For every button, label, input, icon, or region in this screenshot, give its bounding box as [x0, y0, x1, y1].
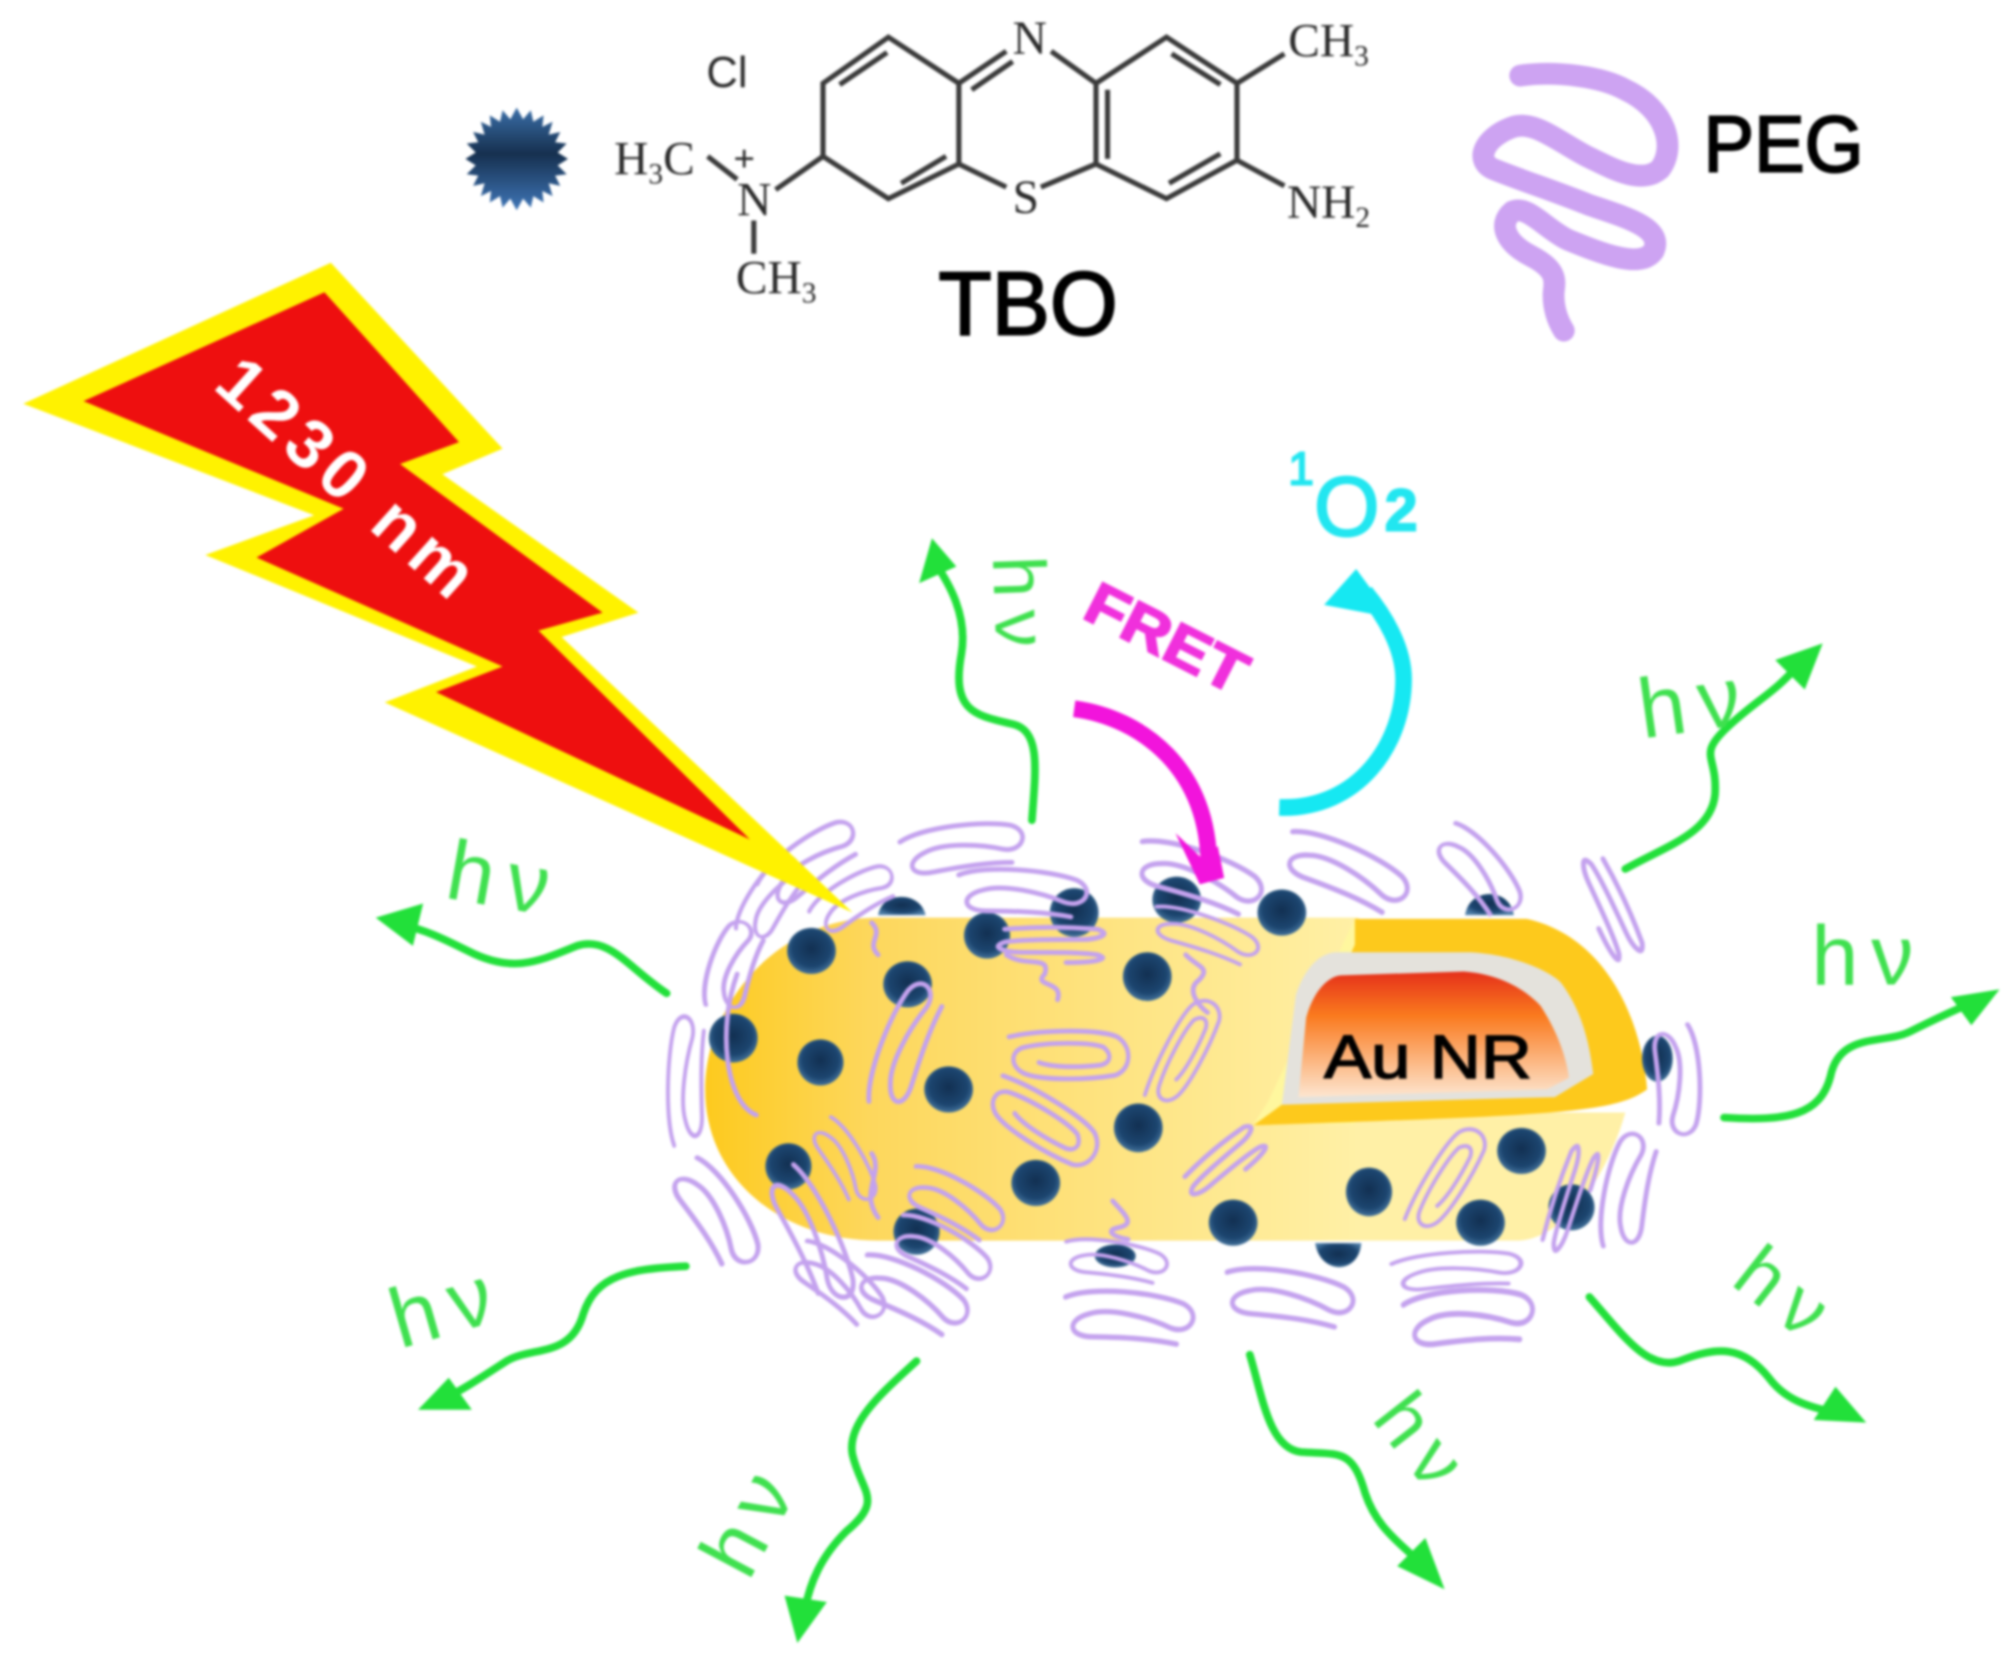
atom labels: N: [1013, 13, 1047, 65]
atom labels: 3: [802, 277, 816, 309]
bolt outer yellow: [23, 263, 852, 913]
emission: bottom-left: [681, 1361, 917, 1643]
label: singlet oxygen 1O2: 1: [1288, 442, 1314, 494]
atom labels: NH: [1287, 177, 1355, 229]
label: singlet oxygen 1O2: 2: [1385, 479, 1418, 544]
emission: right: [1724, 907, 2000, 1119]
rod body: [705, 918, 1625, 1241]
label: PEG: PEG: [1703, 100, 1864, 189]
label: FRET: FRET: [1075, 571, 1258, 707]
ring bonds: [708, 37, 1284, 254]
emission: bottom-left: hν: [681, 1445, 818, 1591]
label: 1230 nm: 1230 nm: [202, 341, 492, 613]
label: singlet oxygen 1O2: O: [1314, 459, 1380, 554]
atom labels: N: [737, 174, 771, 226]
icon: PEG chain legend: [1483, 74, 1668, 331]
atom labels: Cl: [706, 49, 748, 97]
emission: upper-right: [1625, 643, 1823, 869]
emission: lower-left: hν: [379, 1243, 515, 1366]
lightning bolt: 1230 nm laser: [23, 263, 852, 913]
cut face: [1254, 919, 1355, 1124]
bolt inner red: [84, 292, 750, 839]
atom labels: 3: [648, 158, 663, 190]
emission: right: hν: [1811, 907, 1926, 1002]
emission: left: hν: [440, 822, 570, 935]
gold shell cross-section: [1254, 919, 1647, 1125]
emission: up-left: [919, 538, 1064, 820]
arrow: singlet oxygen: [1279, 569, 1404, 808]
emission: lower-left: [379, 1243, 686, 1410]
emission: lower-right: hν: [1719, 1229, 1856, 1363]
emission: lower-right: [1589, 1229, 1866, 1423]
atom labels: [614, 13, 1370, 309]
arrow: FRET: [1074, 709, 1224, 884]
PEG chains coating: [666, 813, 1702, 1347]
TBO particles on rod: [709, 877, 1673, 1268]
grey layer: [1282, 952, 1593, 1105]
atom labels: H: [614, 133, 648, 185]
icon: TBO particle legend: [465, 108, 568, 210]
emission: bottom-middle: [1250, 1355, 1491, 1589]
atom labels: 2: [1355, 202, 1370, 234]
atom labels: 3: [1354, 40, 1369, 72]
label: TBO: TBO: [938, 255, 1118, 355]
gold nanorod: [705, 918, 1647, 1241]
label: Au NR: Au NR: [1324, 1023, 1532, 1092]
emission: upper-right: hν: [1632, 646, 1759, 756]
emission: left: [376, 822, 667, 993]
atom labels: +: [733, 139, 755, 181]
emission: up-left: hν: [977, 554, 1064, 661]
emission: bottom-middle: hν: [1357, 1376, 1491, 1514]
atom labels: S: [1013, 172, 1039, 224]
atom labels: CH: [1288, 15, 1354, 67]
gold core: [1298, 971, 1569, 1097]
chemical structure: TBO: [614, 13, 1370, 309]
atom labels: CH: [736, 252, 802, 304]
atom labels: C: [663, 133, 695, 185]
